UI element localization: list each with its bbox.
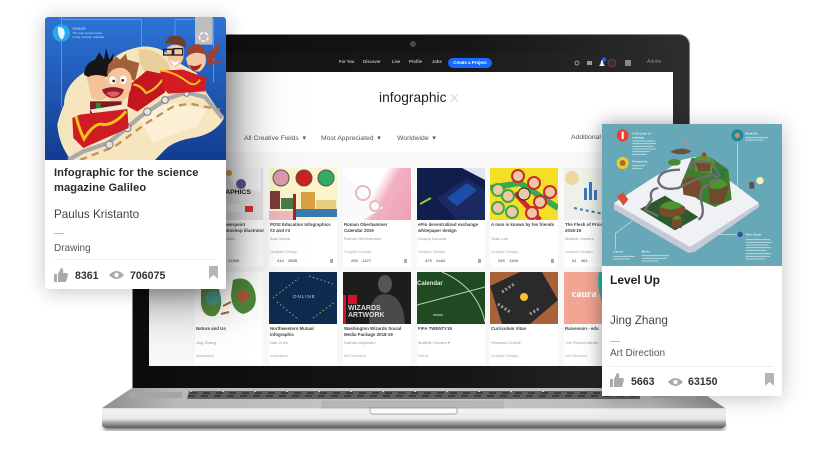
stats row — [54, 266, 218, 282]
row 2 cards: Nature and Us — [196, 326, 226, 331]
project grid: #2 and #3 — [270, 228, 290, 233]
laptop — [101, 34, 727, 431]
project grid: Curriculum Vitae — [491, 326, 526, 331]
laptop base — [101, 388, 727, 431]
row 1 cards: GRAPHICS — [215, 189, 251, 196]
artwork: roller coaster illustration: The most precise metre — [72, 31, 102, 35]
project grid: Grazhy Ivanova — [418, 236, 446, 241]
project grid: WIZARDS — [348, 305, 381, 312]
coaster cars — [127, 71, 166, 112]
artwork: level up isometric map: learning — [632, 135, 644, 139]
project grid: Ana Garcia — [270, 236, 290, 241]
inner garden — [640, 196, 698, 230]
project grid: Infographic — [270, 332, 294, 337]
project grid: The Round Library — [565, 340, 598, 345]
laptop bezel — [132, 34, 690, 388]
character 1 — [84, 48, 114, 78]
project grid: Vincenzo Covelli — [491, 340, 520, 345]
row 1 cards: Infographic Templates — [196, 236, 235, 241]
front car — [72, 109, 129, 148]
grey badge — [195, 17, 213, 45]
row 1 cards: 31808 — [228, 258, 239, 263]
nav icons — [574, 58, 631, 68]
project grid: 81 401 — [572, 258, 588, 263]
icon: thumbs up — [54, 268, 68, 282]
like count: 8361 — [75, 270, 99, 282]
row 1 cards — [195, 168, 263, 267]
project grid: Northwestern Mutual — [270, 326, 314, 331]
stats row — [610, 373, 774, 388]
project grid: Art Direction — [344, 353, 366, 358]
top navigation: For You — [339, 59, 354, 64]
row 2 cards: Illustration — [196, 353, 214, 358]
category: Art Direction — [610, 348, 665, 359]
project grid — [196, 168, 603, 358]
screen — [149, 53, 673, 366]
project grid: Graphic Design — [418, 249, 446, 254]
top navigation: Live — [392, 59, 400, 64]
card title: Infographic for the science — [54, 167, 198, 179]
clear icon: × — [449, 88, 460, 108]
icon: eye — [668, 378, 683, 386]
project grid: Graphic Design — [270, 249, 298, 254]
cream cloud — [57, 46, 224, 160]
author: Paulus Kristanto — [54, 208, 139, 221]
project grid: A man is known by his friends — [491, 222, 554, 227]
search header: Additional Filters — [571, 134, 621, 141]
icon: bookmark — [765, 373, 774, 386]
project grid: FIFA TWENTY19 — [418, 326, 452, 331]
artwork: level up isometric map: Menu — [642, 249, 650, 253]
artwork: level up isometric map: Work life — [745, 131, 758, 135]
project grid: 475 2484 — [425, 258, 445, 263]
view count: 706075 — [130, 270, 165, 282]
icon: thumbs up — [610, 373, 624, 387]
row 1 cards: Free Vector Powerpoint — [196, 222, 245, 227]
left project card — [45, 17, 226, 289]
project grid: whitepaper design — [418, 228, 457, 233]
artwork: level up isometric map: Layout — [613, 249, 623, 253]
project grid: caura — [572, 289, 596, 300]
top navigation: Adobe — [647, 59, 661, 65]
author: Jing Zhang — [610, 314, 668, 327]
project grid: Sean Lee — [491, 236, 508, 241]
row 2 cards: Jing Zhang — [196, 340, 216, 345]
create a project button: Create a Project — [453, 60, 487, 65]
artwork: level up isometric map: Reward Us — [632, 159, 648, 163]
platform — [614, 203, 759, 253]
search header: Most Appreciated ▾ — [321, 135, 381, 142]
project grid: Calendar 2019 — [344, 228, 374, 233]
icon: eye — [109, 271, 124, 279]
project grid: UI/UX — [418, 353, 429, 358]
search header — [149, 72, 673, 152]
view count: 63150 — [688, 376, 717, 388]
project grid: Multiple Owners — [565, 236, 594, 241]
project grid: Graphic Design — [491, 249, 519, 254]
icon: bookmark — [209, 266, 218, 279]
artwork: level up isometric map: Plus Game — [746, 233, 762, 237]
project grid: Graphic Design — [491, 353, 519, 358]
search header: Worldwide ▾ — [397, 135, 436, 142]
row 1 cards: and Adobe Photoshop illustrator — [196, 228, 264, 233]
project grid: Graphic Design — [344, 249, 372, 254]
character 3 — [165, 36, 186, 50]
project grid: Raivesson - edu — [565, 326, 599, 331]
project grid: 253 1109 — [498, 258, 518, 263]
right project card — [602, 124, 782, 396]
artwork: roller coaster illustration: GALILEO — [72, 27, 86, 31]
project grid: Animation — [270, 353, 288, 358]
project grid: Media Package 2018-19 — [344, 332, 393, 337]
project grid: 414 3505 — [277, 258, 297, 263]
shadow cast by left card on screen — [45, 17, 226, 289]
project grid: Nan Chen — [270, 340, 288, 345]
project grid: ONLINE — [293, 294, 316, 299]
text blocks: A life level of — [632, 132, 651, 136]
project grid: The Flesh of Price — [565, 222, 603, 227]
like count: 5663 — [631, 376, 655, 388]
row 2 cards — [195, 272, 263, 371]
roads — [658, 170, 718, 220]
artwork: roller coaster illustration — [45, 17, 226, 160]
shadow cast by right card on screen — [602, 124, 782, 396]
icons — [617, 129, 629, 141]
project grid: ARTWORK — [348, 312, 385, 319]
project grid: 2018-19 — [565, 228, 581, 233]
webcam — [410, 41, 416, 47]
character 4 — [187, 43, 223, 65]
category: Drawing — [54, 243, 91, 254]
track — [68, 92, 223, 160]
project grid: Damian Alejandro — [344, 340, 376, 345]
filter bar — [244, 134, 621, 142]
top navigation: Discover — [363, 59, 381, 64]
search header: All Creative Fields ▾ — [244, 135, 306, 142]
hills — [695, 156, 715, 173]
project grid: Calendar — [417, 281, 443, 287]
artwork: roller coaster illustration: on the "moving" sidewalk — [72, 35, 104, 39]
top navigation — [149, 53, 673, 72]
card title: Level Up — [610, 273, 660, 287]
top navigation: Profile — [409, 59, 422, 64]
project grid: ePin decentralized exchange — [418, 222, 478, 227]
top navigation: Jobs — [432, 59, 442, 64]
project grid: Art Direction — [565, 353, 587, 358]
project grid: POSt Education Infographics — [270, 222, 331, 227]
project grid: Roman Oberhammer — [344, 236, 382, 241]
create a project button — [448, 58, 492, 68]
project grid: Graphic Design — [565, 249, 593, 254]
project grid: Washington Wizards Social — [344, 326, 401, 331]
project grid: 208 1477 — [351, 258, 371, 263]
logo badge — [53, 24, 70, 42]
card title: magazine Galileo — [54, 182, 146, 194]
project grid: Multiple Owners ▾ — [418, 340, 450, 345]
character 2 — [107, 54, 139, 81]
project grid: Roman Oberhammer — [344, 222, 387, 227]
artwork: level up isometric map — [602, 124, 782, 266]
card title — [54, 167, 198, 194]
search term: infographic — [379, 90, 446, 105]
